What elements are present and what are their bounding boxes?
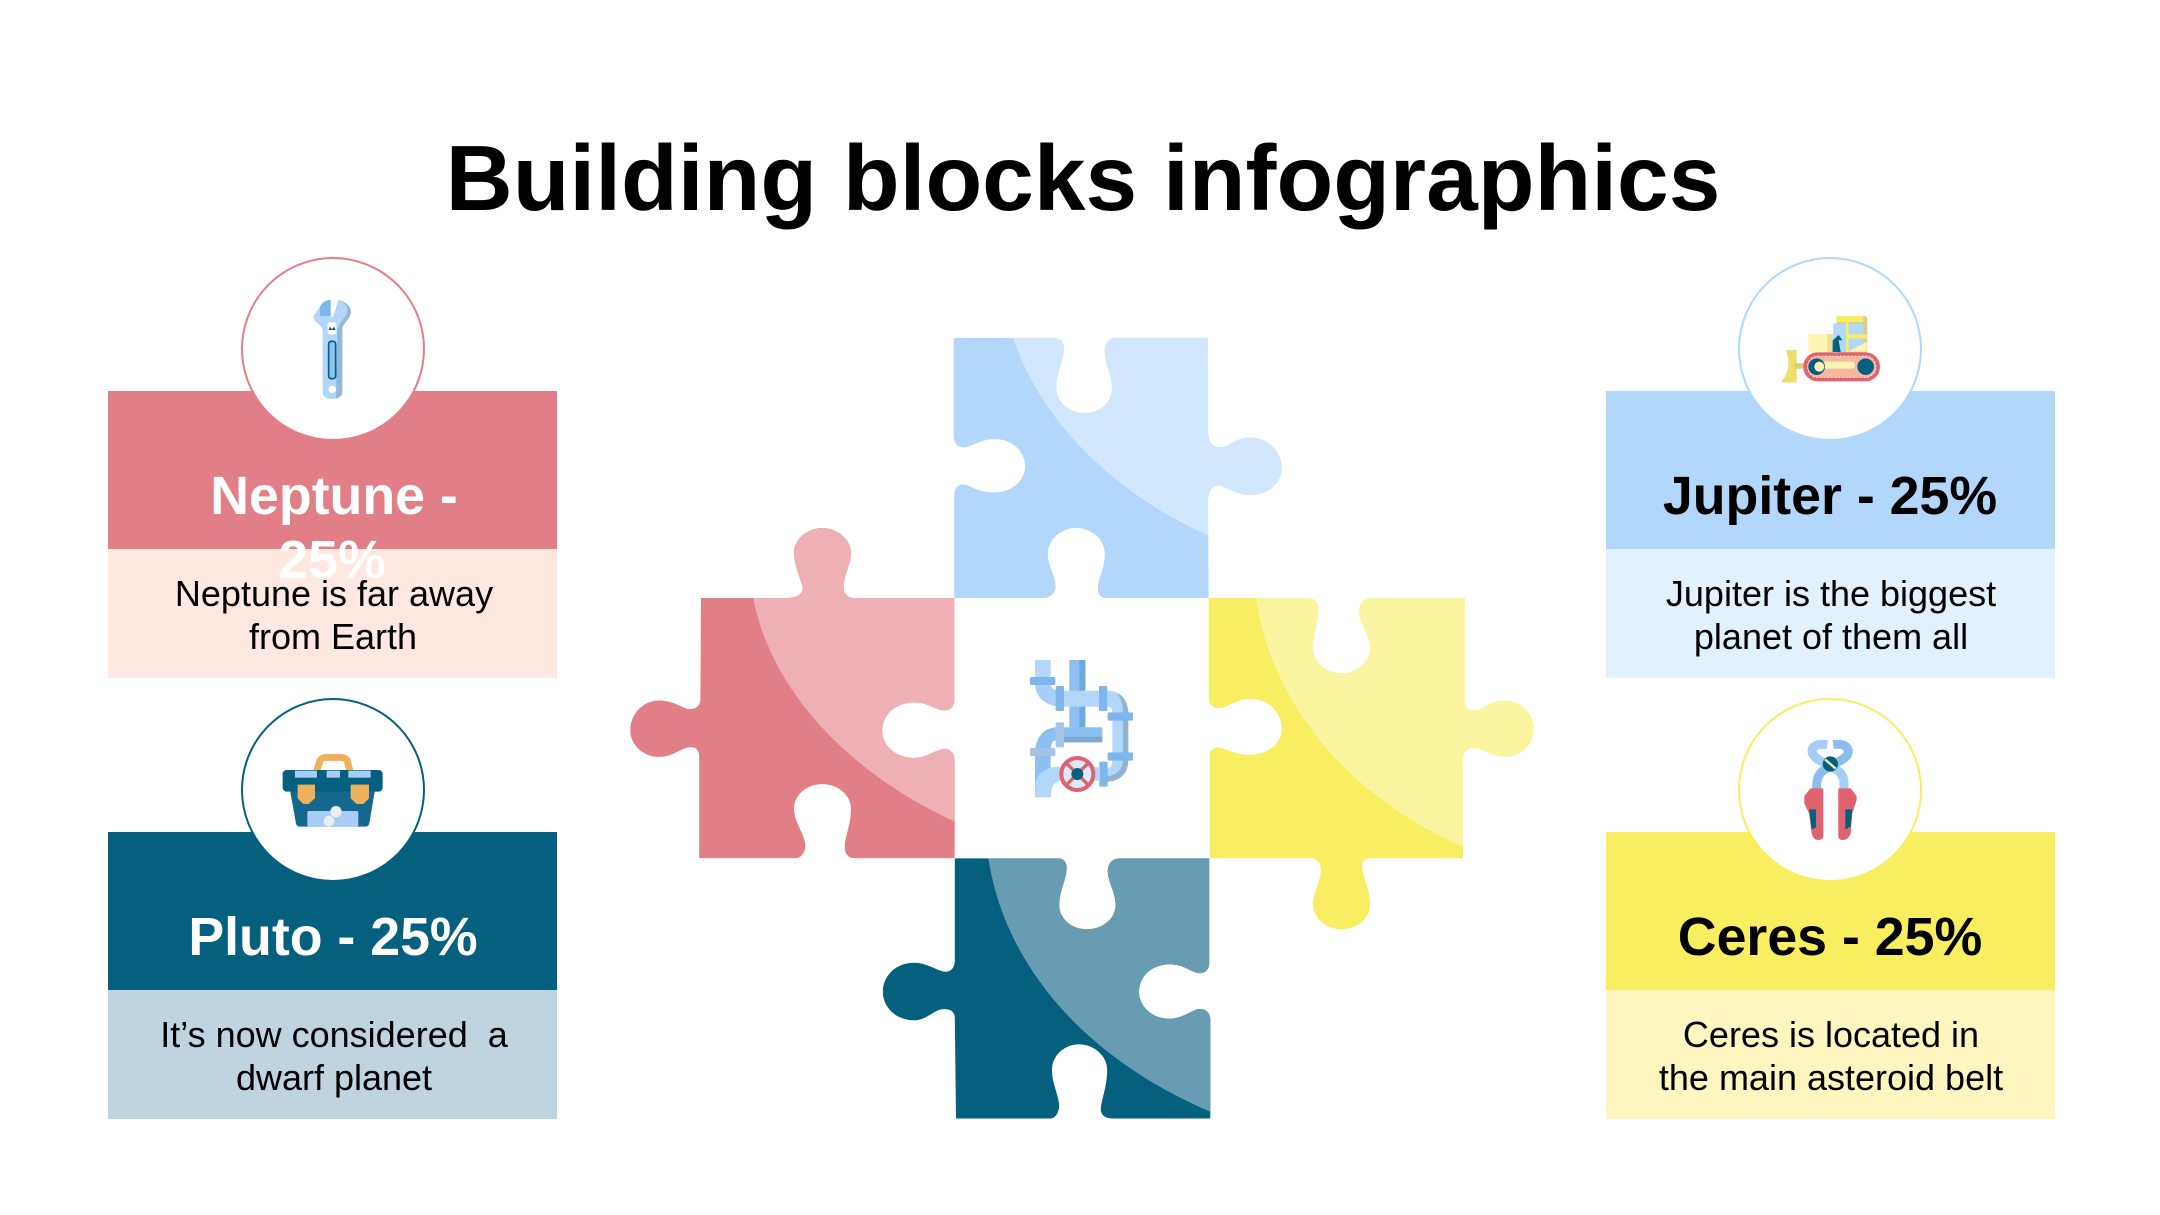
icon: wrench bbox=[313, 300, 351, 399]
Pluto icon circle bbox=[242, 699, 424, 881]
Pluto body band bbox=[108, 990, 557, 1119]
panel: Pluto bbox=[108, 699, 557, 1119]
panel: Jupiter bbox=[1606, 258, 2055, 678]
Ceres description: Ceres is located in bbox=[1683, 1014, 1979, 1055]
Pluto description: It’s now considered a bbox=[160, 1014, 509, 1055]
Ceres heading: Ceres - 25% bbox=[1678, 907, 1982, 967]
Neptune description: Neptune is far away bbox=[175, 573, 493, 614]
Jupiter header band bbox=[1606, 391, 2055, 549]
Pluto heading: Pluto - 25% bbox=[188, 907, 478, 967]
Ceres header band bbox=[1606, 832, 2055, 990]
Neptune body band bbox=[108, 549, 557, 678]
puzzle piece: navy bottom bbox=[875, 853, 1217, 1125]
Neptune header band bbox=[108, 391, 557, 549]
puzzle piece: red left bbox=[620, 521, 962, 866]
Neptune icon circle bbox=[242, 258, 424, 440]
Pluto description: dwarf planet bbox=[236, 1057, 432, 1098]
icon: pliers bbox=[1804, 744, 1857, 840]
Neptune heading: 25% bbox=[278, 530, 386, 590]
Jupiter icon circle bbox=[1739, 258, 1921, 440]
puzzle piece: light blue top bbox=[954, 338, 1282, 598]
Jupiter heading: Jupiter - 25% bbox=[1663, 466, 1997, 526]
panel: Neptune bbox=[108, 258, 557, 678]
Pluto header band bbox=[108, 832, 557, 990]
puzzle piece: yellow right bbox=[1202, 592, 1544, 937]
Neptune description: from Earth bbox=[249, 616, 417, 657]
Jupiter description: planet of them all bbox=[1694, 616, 1968, 657]
Ceres body band bbox=[1606, 990, 2055, 1119]
icon: toolbox bbox=[283, 757, 383, 827]
Jupiter description: Jupiter is the biggest bbox=[1666, 573, 1996, 614]
Neptune heading: Neptune - bbox=[210, 466, 458, 526]
icon: bulldozer bbox=[1781, 316, 1880, 382]
title: Building blocks infographics bbox=[446, 126, 1720, 230]
icon: pipes with valve bbox=[1030, 660, 1133, 797]
Ceres description: the main asteroid belt bbox=[1659, 1057, 2003, 1098]
panel: Ceres bbox=[1606, 699, 2055, 1119]
puzzle graphic bbox=[620, 330, 1544, 1125]
Ceres icon circle bbox=[1739, 699, 1921, 881]
Jupiter body band bbox=[1606, 549, 2055, 678]
